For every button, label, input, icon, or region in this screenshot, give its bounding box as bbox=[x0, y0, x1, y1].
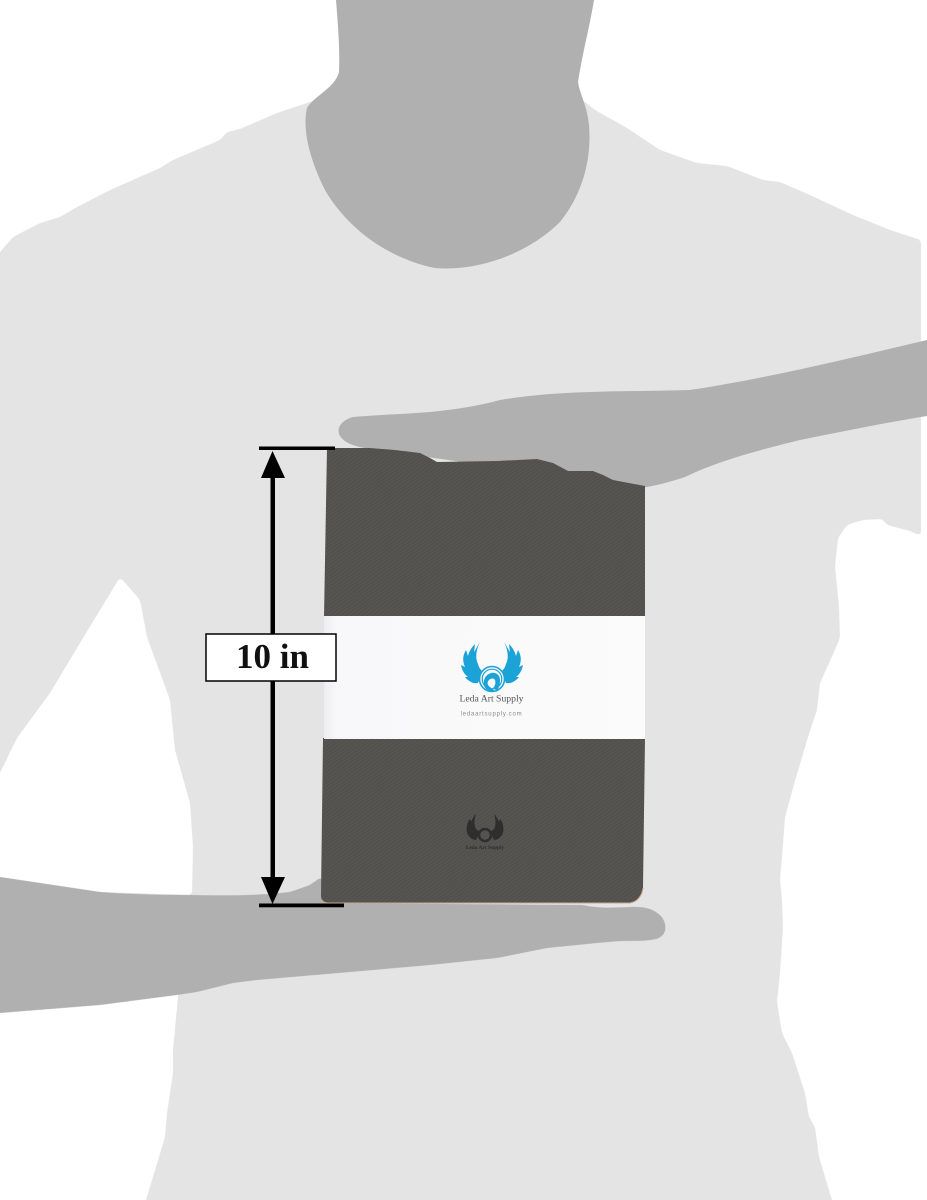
upper hand silhouette bbox=[339, 340, 927, 488]
notebook bbox=[321, 448, 645, 903]
left wing bbox=[461, 642, 483, 683]
embossed name: Leda Art Supply bbox=[466, 845, 504, 851]
blue logo bbox=[461, 642, 523, 692]
logo website: ledaartsupply.com bbox=[461, 712, 522, 718]
notebook lower cover bbox=[321, 738, 645, 903]
notebook upper cover bbox=[324, 448, 645, 617]
notebook bottom edge bbox=[322, 888, 643, 903]
paper belly band bbox=[324, 616, 645, 739]
right wing bbox=[501, 642, 523, 683]
embossed left wing bbox=[467, 814, 480, 840]
emblem rings bbox=[480, 666, 504, 692]
vertical shaft bbox=[270, 470, 275, 885]
label text: 10 in bbox=[236, 637, 309, 676]
emblem inner ring bbox=[482, 669, 502, 689]
logo name: Leda Art Supply bbox=[459, 694, 524, 704]
embossed cover logo bbox=[466, 814, 504, 851]
arrowhead up bbox=[261, 451, 285, 478]
top tick bbox=[259, 446, 335, 450]
embossed right wing bbox=[490, 814, 503, 840]
emblem bird bbox=[484, 673, 500, 691]
embossed emblem bbox=[479, 829, 491, 841]
label box bbox=[206, 634, 336, 681]
head and neck silhouette bbox=[306, 0, 594, 269]
arrowhead down bbox=[261, 877, 285, 904]
lower hand silhouette bbox=[0, 875, 666, 1014]
bottom tick bbox=[259, 904, 344, 907]
dimension marker: 10 in bbox=[206, 446, 344, 907]
